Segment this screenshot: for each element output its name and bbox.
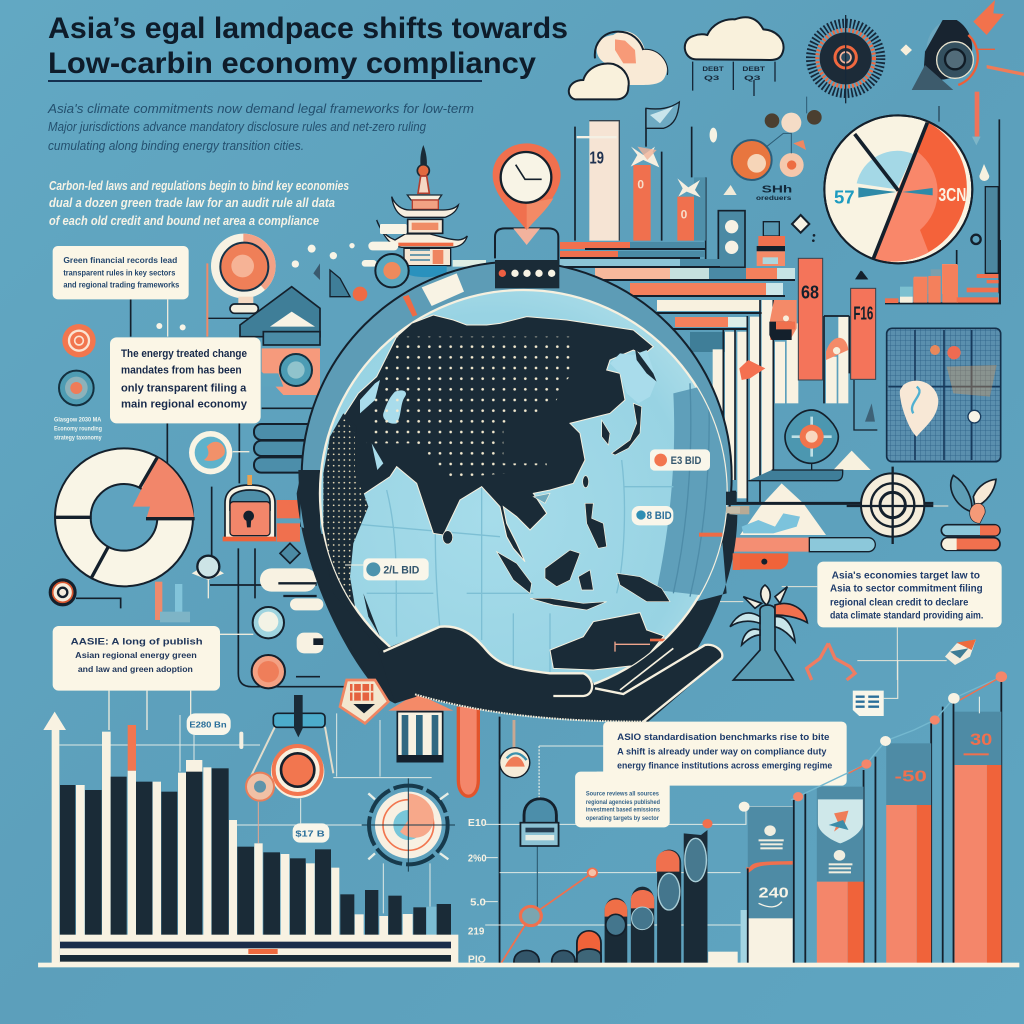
small white dots xyxy=(156,245,316,330)
callout: small text box: investment based emissions xyxy=(586,807,660,814)
cream bars xyxy=(76,725,437,935)
icon: orange coin lower xyxy=(252,655,285,688)
callout: box three: and law and green adoption xyxy=(78,664,193,674)
icon: small diamond xyxy=(280,543,300,563)
small caption xyxy=(723,185,792,202)
callout: box one xyxy=(53,246,189,299)
callout: right text box xyxy=(720,562,1002,680)
left y-axis labels: 2%0 xyxy=(468,854,487,864)
chart: pie xyxy=(824,115,972,263)
intro text block: cumulating along binding energy transition cities. xyxy=(48,139,304,153)
map pill: upper value xyxy=(650,449,710,471)
panel: bottom-left bar chart xyxy=(43,693,478,963)
small document icon xyxy=(853,660,898,716)
secondary white text block: of each old credit and bound net area a compliance xyxy=(49,214,319,228)
column values: -50 xyxy=(895,767,927,786)
icon: diamond spark xyxy=(900,44,912,56)
map panel xyxy=(887,328,1001,462)
callout: small text box: operating targets by sector xyxy=(586,815,659,822)
icon: teal coin xyxy=(59,371,94,405)
icon fragments on stripes xyxy=(739,300,848,380)
panel: left column xyxy=(50,234,347,730)
panel: stacked bars and vertical columns xyxy=(713,240,1002,680)
labelled orange bars xyxy=(798,258,877,430)
icon: small rocket xyxy=(945,639,976,665)
callout: wide text box: ASIO standardisation benchmarks rise to bite xyxy=(617,732,829,742)
cloud caption xyxy=(693,62,775,96)
chart: mini bars right xyxy=(857,119,999,294)
callout: box two: only transparent filing a xyxy=(121,382,246,394)
y axis arrow xyxy=(43,712,66,963)
cream vertical stripes xyxy=(713,300,849,503)
icon: ring coin xyxy=(189,431,232,474)
callout: right text box: Asia to sector commitment filing xyxy=(830,584,983,595)
data bubble xyxy=(187,713,243,749)
icon: globe xyxy=(297,260,740,722)
small white legend text: Glasgow 2030 MA xyxy=(54,416,101,423)
land: Eurasia xyxy=(323,315,670,670)
left y-axis labels: PIO xyxy=(468,955,486,966)
icon: lock xyxy=(520,799,559,846)
icon: glass lens with bulb stand xyxy=(207,234,276,337)
shield icon xyxy=(818,799,863,843)
callout: box one: Green financial records lead xyxy=(63,256,177,265)
callout: box one: transparent rules in key sectors xyxy=(63,268,176,277)
icon: padlock xyxy=(223,475,300,542)
cloud caption: DEBT xyxy=(702,67,724,73)
map pill: lower value xyxy=(345,558,429,580)
small bars xyxy=(155,582,190,622)
callout: right text box: regional clean credit to declare xyxy=(830,598,969,609)
callout: box two xyxy=(110,337,261,423)
labelled orange bars: 68 xyxy=(801,281,819,302)
connector lines xyxy=(109,299,347,730)
map pill: upper value: E3 BID xyxy=(671,455,701,467)
callout: small text box: regional agencies published xyxy=(586,799,660,806)
small white legend text xyxy=(54,416,102,441)
horizontal stripe bars behind globe xyxy=(560,242,795,352)
callout: box two: The energy treated change xyxy=(121,348,247,360)
small caption: oreduers xyxy=(756,196,792,202)
callout: wide text box xyxy=(597,722,847,786)
small white legend text: Economy rounding xyxy=(54,425,102,432)
sea disc xyxy=(320,290,740,697)
icon: glass ball xyxy=(253,607,284,638)
panel: top-right icons and charts xyxy=(569,0,1024,294)
left y-axis labels xyxy=(468,818,487,966)
icon: clouds xyxy=(569,17,784,99)
left y-axis labels: 219 xyxy=(468,927,485,938)
icon: pill stack xyxy=(254,424,317,473)
map pill: lower value: 2/L BID xyxy=(383,565,419,577)
map pill: middle value xyxy=(632,506,673,525)
title xyxy=(48,12,568,82)
dark bars xyxy=(60,768,451,935)
callout: small text box: Source reviews all sources xyxy=(586,791,659,798)
icon: glass medallion near temple xyxy=(330,254,409,301)
icon: orange coin xyxy=(62,324,96,357)
icon: small dark coin with leader xyxy=(50,580,121,608)
callout: right text box: Asia's economies target law to xyxy=(832,570,980,581)
small white legend text: strategy taxonomy xyxy=(54,434,102,441)
chart: top bars with flag: 0 xyxy=(681,207,688,221)
icon: hexagon badge xyxy=(340,680,388,723)
callout: box one: and regional trading frameworks xyxy=(63,280,180,289)
column values xyxy=(759,730,992,907)
chart: top bars with flag: 19 xyxy=(589,147,604,167)
icon: sunburst dial xyxy=(811,15,881,103)
callout: box two: mandates from has been xyxy=(121,365,242,377)
intro text block: Major jurisdictions advance mandatory disclosure rules and net-zero ruling xyxy=(48,120,426,134)
map pill: middle value: 8 BID xyxy=(647,510,672,522)
chart: donut xyxy=(55,448,195,586)
icon: palm tree xyxy=(730,585,807,680)
secondary white text block: Carbon-led laws and regulations begin to bind key economies xyxy=(49,179,349,193)
callout: box three: AASIE: A long of publish xyxy=(71,636,203,646)
chart: top bars with flag: 0 xyxy=(637,177,644,191)
icon: orange hexagon outline xyxy=(807,643,855,680)
icon: balance scale xyxy=(246,695,333,843)
cloud caption: Q3 xyxy=(744,76,762,82)
accent marks on right edge xyxy=(699,492,740,570)
base strips xyxy=(59,935,458,963)
icon: teal flower emblem xyxy=(785,410,838,471)
icon: medal xyxy=(500,720,530,778)
cloud caption: DEBT xyxy=(742,67,765,73)
intro text block: Asia's climate commitments now demand legal frameworks for low-term xyxy=(47,102,474,116)
arrow: salmon down xyxy=(972,92,981,145)
building glyphs xyxy=(759,825,852,873)
callout: box three: Asian regional energy green xyxy=(75,650,197,660)
icon: temple roof xyxy=(240,263,320,345)
bar under globe xyxy=(733,538,875,569)
icon: map pin with clock xyxy=(493,143,561,260)
column values: 240 xyxy=(759,885,789,901)
cream wedge on ring xyxy=(422,273,464,306)
title: Asia’s egal lamdpace shifts towards xyxy=(48,12,568,45)
labelled orange bars: F16 xyxy=(853,302,873,323)
outer ring xyxy=(302,262,732,692)
chart: rising columns xyxy=(708,680,1001,963)
icon: pagoda xyxy=(330,145,486,277)
callout: box three xyxy=(53,626,220,691)
icon: floral cluster xyxy=(732,97,822,180)
icon: bank with roof xyxy=(388,693,478,796)
title: Low-carbin economy compliancy xyxy=(48,47,536,80)
column values: 30 xyxy=(970,730,992,749)
secondary white text block: dual a dozen green trade law for an audit rule all data xyxy=(49,196,335,210)
panel: bottom-right charts xyxy=(38,660,1019,967)
axis and gridlines xyxy=(485,717,793,963)
callout: right text box: data climate standard providing aim. xyxy=(830,611,984,622)
icon: pills by globe xyxy=(260,568,323,653)
trend line with markers xyxy=(739,671,1007,812)
icon: leaves on stacked pills xyxy=(941,475,1000,550)
land: Australia xyxy=(550,613,664,670)
data bubble lower xyxy=(293,823,329,843)
hand xyxy=(378,626,722,722)
icon: target wheel xyxy=(362,778,455,872)
base line xyxy=(38,963,1019,967)
thin gridlines xyxy=(59,713,432,913)
data bubble lower: $17 B xyxy=(295,828,325,838)
secondary white text block xyxy=(49,179,349,228)
small caption: SHh xyxy=(762,185,792,196)
chart: dark icon column xyxy=(718,211,815,267)
pie values: 3CN xyxy=(938,184,966,205)
icon: dark camera lens with arrow xyxy=(912,0,1024,90)
icon: target crosshair xyxy=(847,467,948,544)
trend line orange xyxy=(501,819,713,963)
callout: wide text box: A shift is already under way on compliance duty xyxy=(617,747,827,756)
left y-axis labels: 5.0 xyxy=(470,898,486,908)
dot grid on land xyxy=(367,337,577,478)
data bubble: E280 Bn xyxy=(189,720,227,729)
chart: top bars with flag xyxy=(575,102,717,260)
pie values xyxy=(834,184,966,207)
cloud caption: Q3 xyxy=(704,76,721,82)
chart: capsule bars xyxy=(514,830,707,963)
pie values: 57 xyxy=(834,186,855,207)
islands xyxy=(443,476,670,610)
icon: round lens xyxy=(192,556,224,580)
band behind callout xyxy=(262,348,320,395)
callout: wide text box: energy finance institutions across emerging regime xyxy=(617,761,832,770)
mini base line chart xyxy=(885,240,1000,303)
mountains and rail xyxy=(726,451,933,535)
left y-axis labels: E10 xyxy=(468,818,487,829)
callout: box two: main regional economy xyxy=(121,398,247,410)
intro text block xyxy=(47,102,474,153)
dark dots plate xyxy=(495,260,559,288)
callout: small text box xyxy=(575,772,670,827)
